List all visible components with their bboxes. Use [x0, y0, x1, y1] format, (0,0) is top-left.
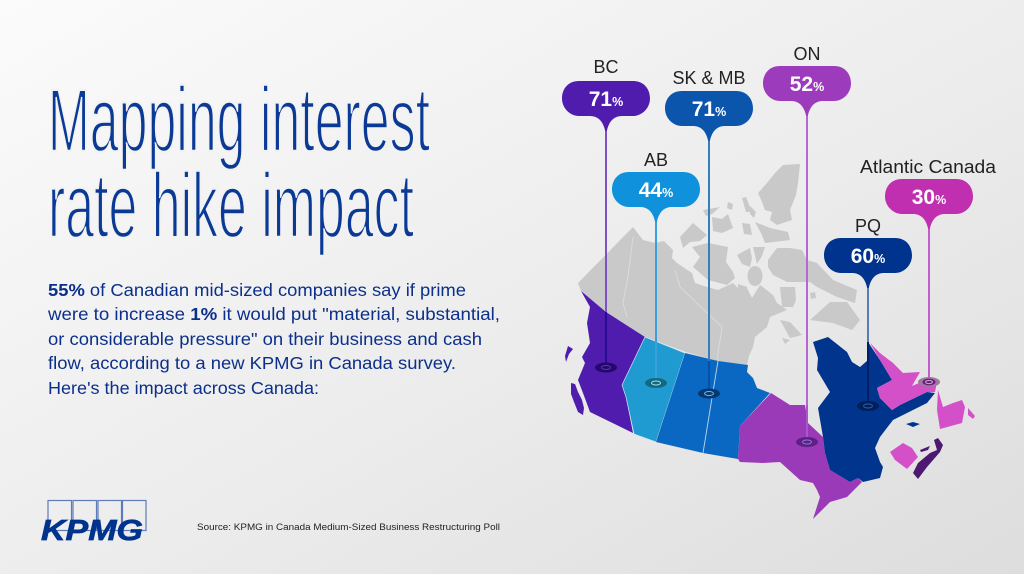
intro text block: or considerable pressure" on their business and cash [48, 329, 482, 349]
intro text block: were to increase 1% it would put "material, substantial, [47, 304, 500, 324]
callout: BC: BC [593, 57, 619, 77]
callout: PQ: 60% [851, 245, 885, 268]
intro text block: 55% of Canadian mid-sized companies say if prime [48, 280, 466, 300]
map: northern territories (no data) [578, 164, 860, 365]
callout: ON: 52% [790, 73, 824, 96]
callout: PQ [824, 216, 912, 411]
region: Nova Scotia [913, 438, 943, 479]
title: rate hike impact [48, 155, 414, 257]
callout: SK and MB [665, 68, 753, 398]
callout: Atlantic Canada: Atlantic Canada [860, 157, 997, 177]
callout: BC: 71% [589, 88, 623, 111]
region: Quebec [813, 337, 935, 482]
KPMG logo [41, 500, 146, 547]
title [48, 69, 430, 257]
callout: AB: AB [644, 150, 668, 170]
region: Saskatchewan and Manitoba [656, 353, 770, 459]
region: British Columbia [565, 291, 645, 433]
callout: ON [763, 44, 851, 447]
region: Atlantic Canada [870, 343, 975, 469]
KPMG logo: KPMG [41, 515, 143, 547]
callout: SK and MB: 71% [692, 98, 726, 121]
map of Canada [565, 164, 975, 519]
callout: PQ: PQ [855, 216, 881, 236]
region: Alberta [622, 337, 685, 442]
region: Ontario [738, 393, 862, 519]
callout: AB: 44% [639, 179, 673, 202]
callout: ON: ON [794, 44, 820, 64]
intro text block: flow, according to a new KPMG in Canada survey. [48, 353, 456, 373]
intro text block [47, 280, 500, 398]
title: Mapping interest [48, 69, 430, 171]
source note: Source: KPMG in Canada Medium-Sized Business Restructuring Poll [197, 522, 500, 533]
callout: Atlantic Canada [860, 157, 997, 387]
callout: Atlantic Canada: 30% [912, 186, 946, 209]
callout: AB [612, 150, 700, 388]
intro text block: Here's the impact across Canada: [48, 378, 319, 398]
map: territory borders [623, 237, 722, 360]
callout: SK and MB: SK & MB [672, 68, 746, 88]
callout: BC [562, 57, 650, 372]
